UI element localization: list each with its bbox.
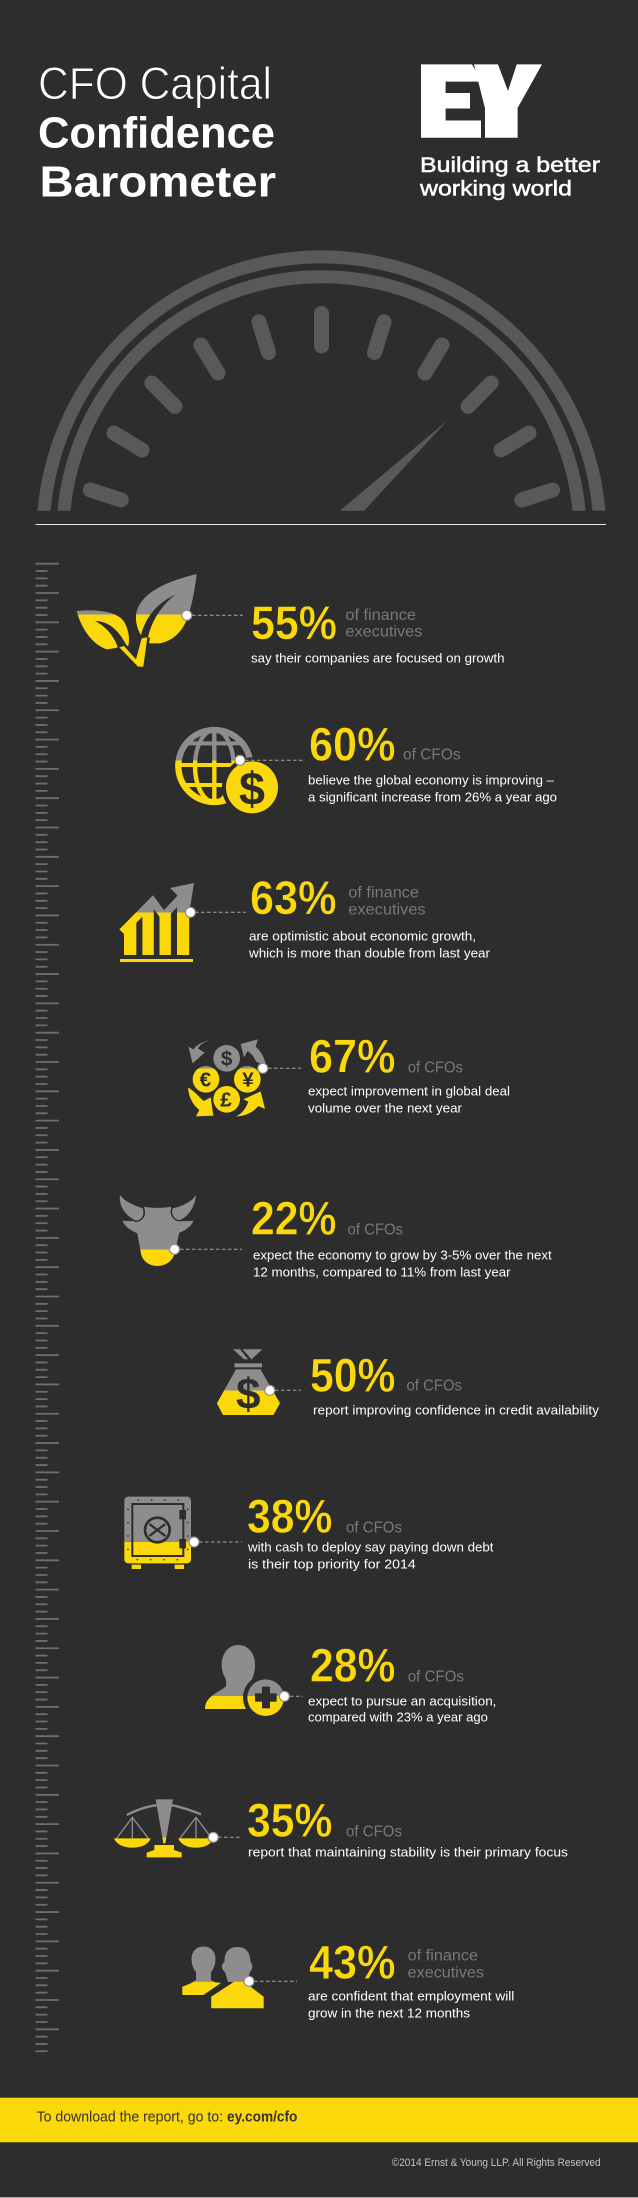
audience label: of CFOs xyxy=(408,1059,463,1076)
icon: currency exchange: $ xyxy=(221,1048,233,1071)
stat: 43% xyxy=(309,1935,396,1988)
audience label: of CFOs xyxy=(403,747,461,764)
description: expect the economy to grow by 3-5% over the next xyxy=(253,1248,552,1263)
EY logo xyxy=(419,64,600,201)
icon: leaves xyxy=(77,574,197,669)
description: expect improvement in global deal xyxy=(308,1084,510,1099)
description: are optimistic about economic growth, xyxy=(249,928,476,943)
stat: 50% xyxy=(310,1349,396,1402)
connector xyxy=(192,614,243,616)
row 1: 55% xyxy=(77,574,504,669)
icon: person with plus xyxy=(205,1645,288,1720)
description: a significant increase from 26% a year ago xyxy=(308,790,557,805)
audience label xyxy=(348,885,426,919)
marker dot xyxy=(235,755,245,765)
title xyxy=(38,58,276,206)
connector xyxy=(199,1541,242,1543)
row 8: 28% xyxy=(205,1639,496,1725)
row 6: 50% xyxy=(217,1349,600,1419)
audience label: of CFOs xyxy=(406,1378,462,1395)
description: expect to pursue an acquisition, xyxy=(308,1694,496,1709)
description: grow in the next 12 months xyxy=(308,2006,471,2021)
banner text: ey.com/cfo xyxy=(227,2109,297,2126)
marker dot xyxy=(279,1691,289,1701)
description: 12 months, compared to 11% from last year xyxy=(253,1265,511,1280)
description: report that maintaining stability is their primary focus xyxy=(248,1845,569,1860)
stat: 35% xyxy=(247,1794,332,1847)
connector xyxy=(290,1695,303,1697)
marker dot xyxy=(265,1385,275,1395)
audience label: executives xyxy=(345,624,423,641)
audience label: of CFOs xyxy=(346,1824,402,1841)
icon: globe and coin: $ xyxy=(239,762,265,814)
icon: currency exchange: ¥ xyxy=(242,1069,254,1092)
icon: two people xyxy=(182,1946,264,2008)
description: volume over the next year xyxy=(308,1101,463,1116)
icon: currency exchange: € xyxy=(200,1069,212,1092)
marker dot xyxy=(189,1537,199,1547)
audience label xyxy=(345,607,423,641)
icon: rising bar chart xyxy=(117,870,194,962)
EY logo: working world xyxy=(419,177,572,201)
description: which is more than double from last year xyxy=(248,945,491,960)
marker dot xyxy=(182,610,192,620)
stat: 63% xyxy=(250,871,336,924)
row 9: 35% xyxy=(114,1794,569,1860)
connector xyxy=(180,1248,242,1250)
title: Confidence xyxy=(38,108,275,157)
stat: 67% xyxy=(309,1030,396,1083)
row 2: 60% xyxy=(177,717,557,817)
icon: money bag xyxy=(217,1349,280,1419)
marker dot xyxy=(208,1832,218,1842)
download banner xyxy=(0,2098,638,2142)
ruler scale xyxy=(42,563,53,2053)
audience label: of finance xyxy=(345,607,416,624)
description xyxy=(247,1540,494,1572)
icon: currency exchange xyxy=(188,1039,266,1116)
banner text: To download the report, go to: xyxy=(37,2109,223,2126)
marker dot xyxy=(170,1244,180,1254)
icon: money bag: $ xyxy=(236,1370,260,1419)
gauge tick marks xyxy=(90,314,553,500)
description xyxy=(253,1248,552,1280)
stat: 22% xyxy=(251,1192,336,1245)
stat: 55% xyxy=(251,596,337,649)
gauge xyxy=(38,250,606,511)
description: with cash to deploy say paying down debt xyxy=(247,1540,494,1555)
description xyxy=(308,772,557,805)
icon: safe xyxy=(124,1497,191,1569)
divider line xyxy=(36,524,606,525)
description xyxy=(308,1084,510,1116)
marker dot xyxy=(185,907,195,917)
description: is their top priority for 2014 xyxy=(248,1557,416,1572)
marker dot xyxy=(244,1976,254,1986)
audience label: executives xyxy=(348,902,426,919)
audience label: of CFOs xyxy=(348,1222,403,1239)
stat: 38% xyxy=(247,1490,332,1543)
stat: 60% xyxy=(309,717,396,770)
connector xyxy=(254,1980,297,1982)
audience label: of finance xyxy=(408,1948,478,1965)
audience label xyxy=(408,1948,484,1982)
row 3: 63% xyxy=(117,870,491,962)
title: Barometer xyxy=(40,157,276,206)
connector xyxy=(218,1836,241,1838)
connector xyxy=(195,911,246,913)
copyright: ©2014 Ernst & Young LLP. All Rights Reserved xyxy=(392,2157,601,2169)
audience label: of CFOs xyxy=(408,1669,464,1686)
description: report improving confidence in credit availability xyxy=(313,1403,600,1418)
description: compared with 23% a year ago xyxy=(308,1710,488,1725)
icon: globe and coin xyxy=(177,730,282,817)
audience label: executives xyxy=(408,1965,484,1982)
EY logo: Building a better xyxy=(420,153,600,177)
row 10: 43% xyxy=(182,1935,514,2021)
connector xyxy=(268,1067,301,1069)
description xyxy=(308,1694,496,1725)
description xyxy=(308,1989,514,2021)
audience label: of finance xyxy=(348,885,419,902)
description xyxy=(248,928,491,960)
marker dot xyxy=(258,1063,268,1073)
row 5: 22% xyxy=(120,1192,552,1280)
connector xyxy=(245,759,304,761)
title: CFO Capital xyxy=(38,58,272,109)
connector xyxy=(275,1389,301,1391)
description: say their companies are focused on growth xyxy=(251,651,504,666)
row 4: 67% xyxy=(188,1030,510,1116)
stat: 28% xyxy=(310,1639,396,1692)
audience label: of CFOs xyxy=(346,1520,402,1537)
description: believe the global economy is improving – xyxy=(308,772,555,787)
icon: balance scales xyxy=(114,1799,213,1857)
icon: bull head xyxy=(120,1195,196,1266)
row 7: 38% xyxy=(124,1490,494,1572)
gauge needle xyxy=(340,420,448,511)
description: are confident that employment will xyxy=(308,1989,514,2004)
icon: currency exchange: £ xyxy=(220,1089,232,1112)
